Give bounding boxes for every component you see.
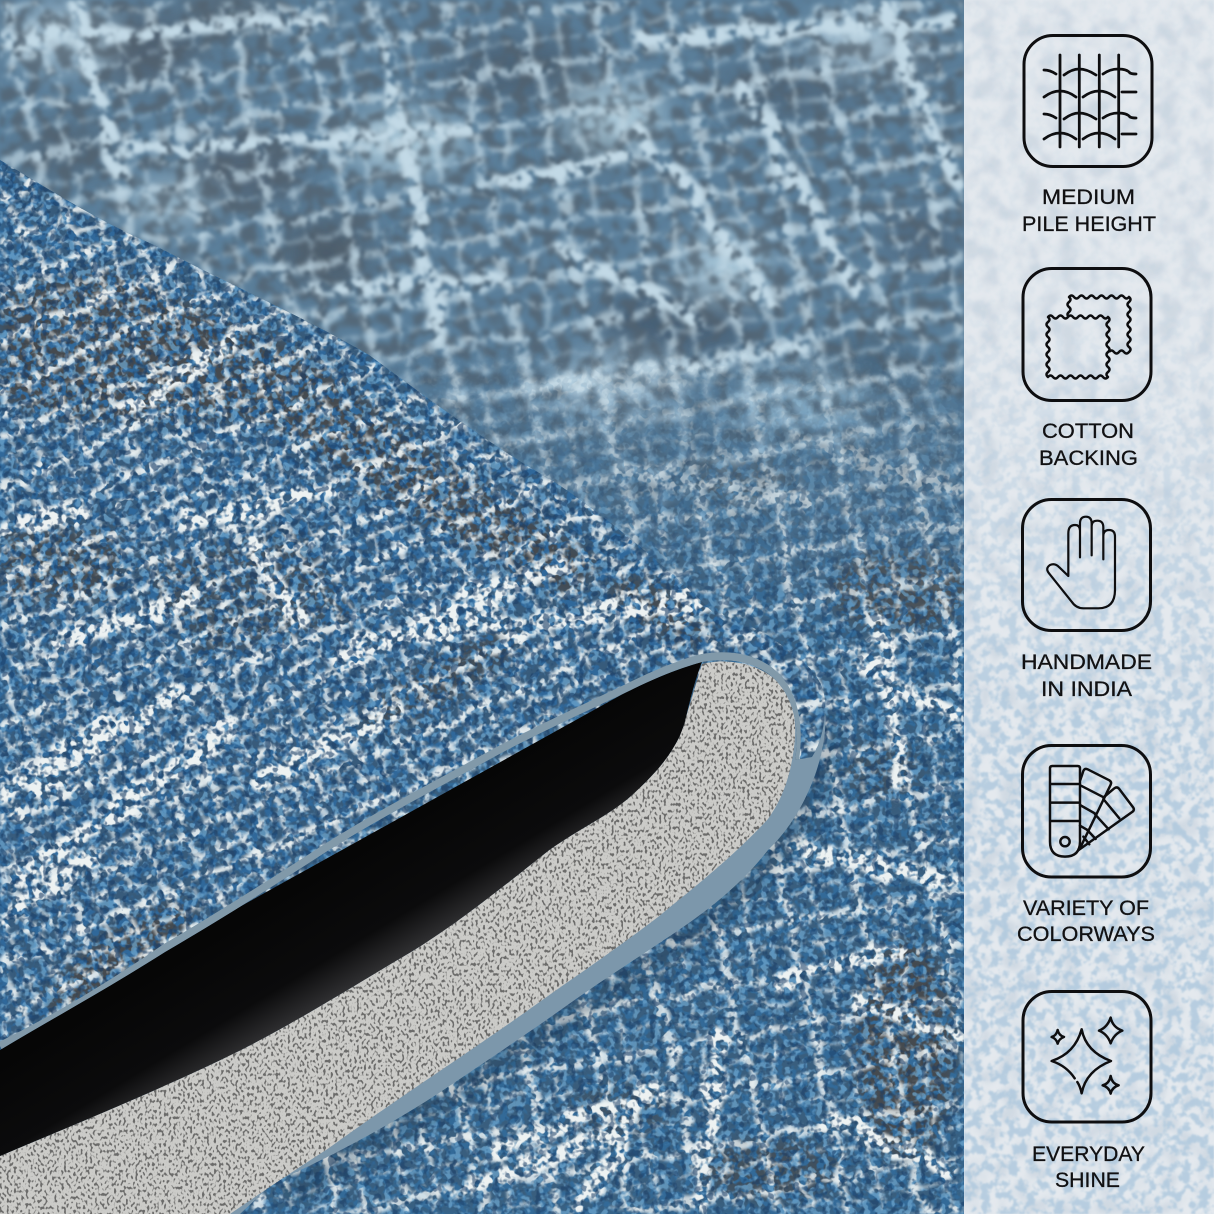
label: handmade in India — [1021, 650, 1152, 701]
icon: sparkles — [1023, 992, 1151, 1122]
label: everyday shine: EVERYDAY — [1032, 1142, 1145, 1166]
label: everyday shine: SHINE — [1055, 1168, 1120, 1192]
icon: fabric swatches — [1023, 268, 1151, 400]
label: variety of colorways: COLORWAYS — [1017, 922, 1155, 946]
dark cavity under the fold — [0, 650, 702, 1156]
rug lip along fold — [0, 656, 797, 1046]
feature: variety of colorways — [1017, 746, 1155, 946]
rolled rug top surface — [0, 140, 840, 1060]
feature: cotton backing — [1023, 268, 1151, 470]
shadow under the fold — [290, 720, 830, 1190]
rug surface: in-focus yarn, lower right — [0, 300, 970, 1214]
rug surface: out-of-focus plaid, upper area — [0, 0, 964, 626]
feature: medium pile height — [1022, 36, 1156, 236]
panel: feature sidebar — [964, 0, 1214, 1214]
label: cotton backing: BACKING — [1039, 446, 1138, 470]
underside: cotton backing crescent — [0, 640, 830, 1214]
underside binding edge — [215, 680, 826, 1214]
label: medium pile height: PILE HEIGHT — [1022, 212, 1156, 236]
feature: everyday shine — [1023, 992, 1151, 1192]
icon: hand — [1022, 500, 1150, 630]
icon: colour swatch fan — [1022, 746, 1150, 877]
label: everyday shine — [1032, 1142, 1145, 1192]
label: variety of colorways: VARIETY OF — [1023, 896, 1149, 920]
label: handmade in India: IN INDIA — [1041, 677, 1133, 701]
label: cotton backing — [1039, 419, 1138, 470]
label: cotton backing: COTTON — [1042, 419, 1134, 443]
icon: woven pile — [1024, 36, 1152, 166]
label: handmade in India: HANDMADE — [1021, 650, 1152, 674]
feature: handmade in India — [1021, 500, 1152, 701]
photo: blue woven rug with rolled corner — [0, 0, 970, 1214]
label: medium pile height — [1022, 185, 1156, 236]
label: medium pile height: MEDIUM — [1042, 185, 1135, 209]
label: variety of colorways — [1017, 896, 1155, 946]
